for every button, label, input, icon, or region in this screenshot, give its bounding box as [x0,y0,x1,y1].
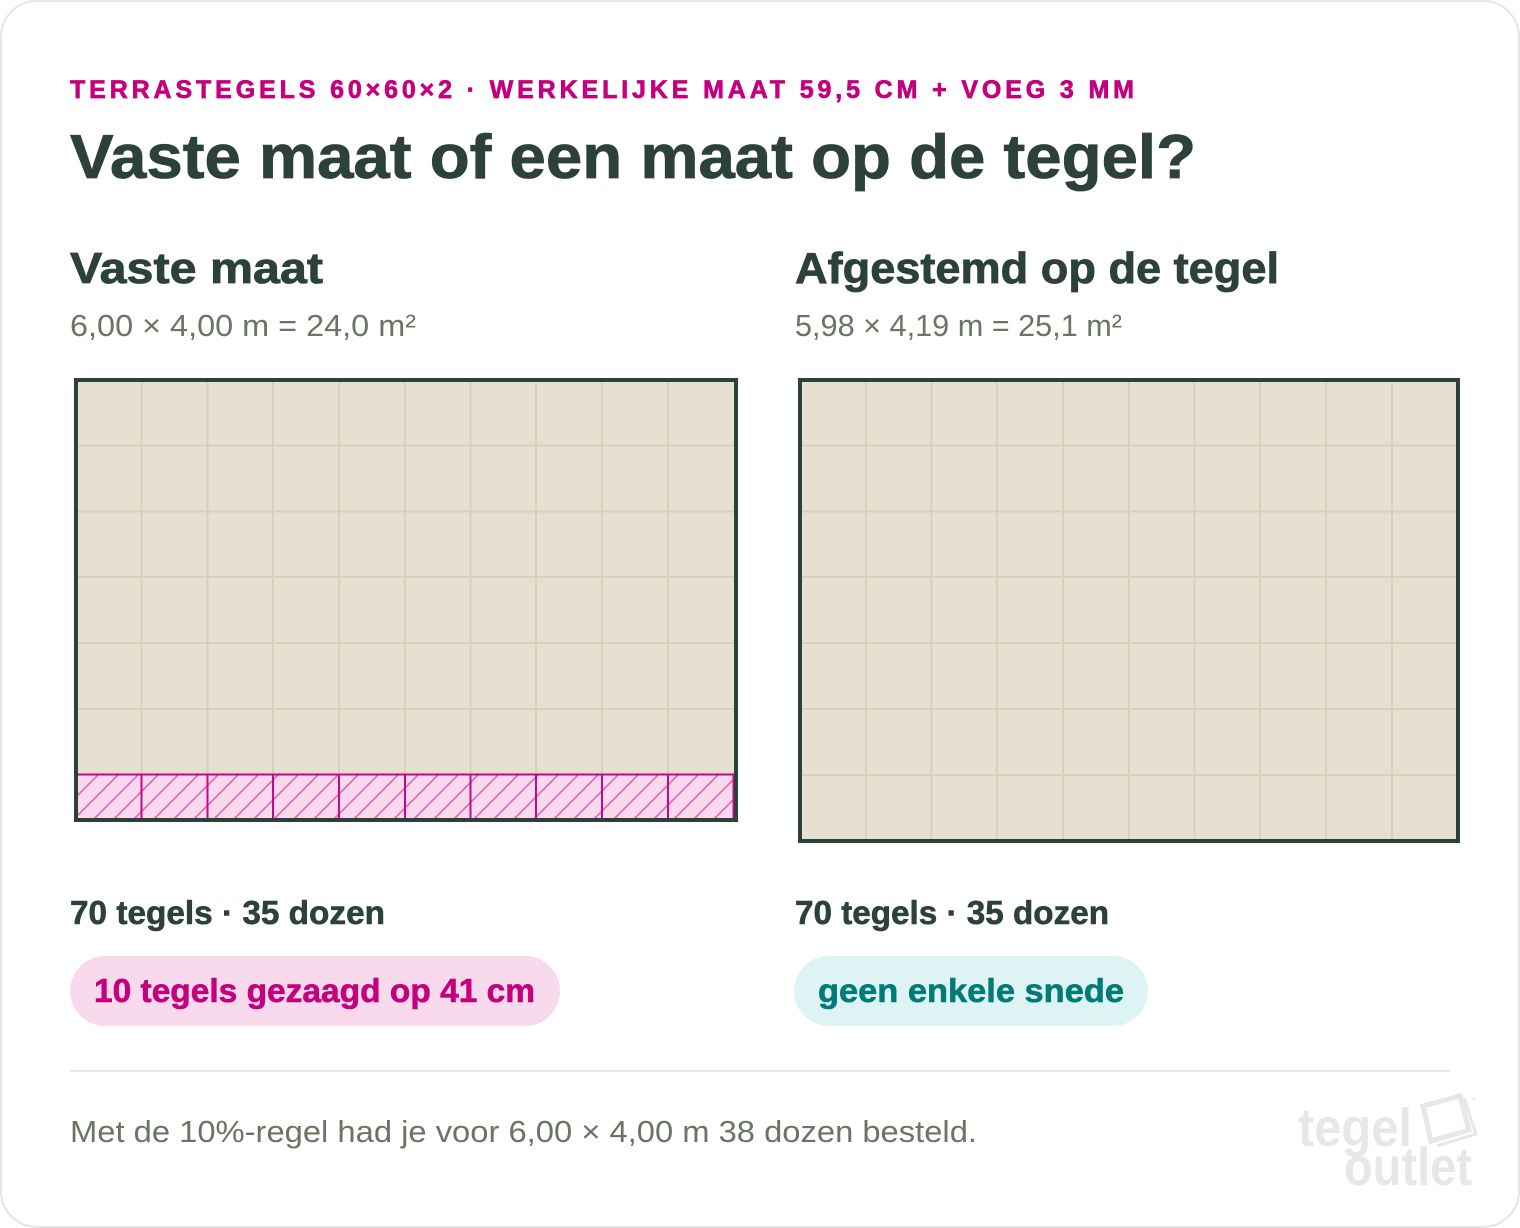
eyebrow: TERRASTEGELS 60×60×2 · WERKELIJKE MAAT 59,5 CM + VOEG 3 MM [70,76,1134,104]
pill: geen snede: geen enkele snede [818,972,1124,1009]
panel: vaste maat [70,244,736,1026]
logo: tegel outlet: outlet [1344,1137,1472,1197]
heading: afgestemd: Afgestemd op de tegel [795,244,1279,293]
panel: afgestemd op de tegel [794,244,1458,1026]
title: Vaste maat of een maat op de tegel? [70,123,1196,192]
dimensions: afgestemd: 5,98 × 4,19 m = 25,1 m² [795,308,1122,343]
logo: tegel outlet: tegel [1298,1098,1412,1158]
stats: vaste maat: 70 tegels · 35 dozen [70,894,385,931]
stats: afgestemd: 70 tegels · 35 dozen [795,894,1109,931]
pill: geen snede [794,956,1148,1026]
pill: gezaagd [70,956,560,1026]
footer note: Met de 10%-regel had je voor 6,00 × 4,00 m 38 dozen besteld. [70,1114,977,1149]
pill: gezaagd: 10 tegels gezaagd op 41 cm [94,972,535,1009]
tile grid: vaste maat [76,380,736,820]
heading: vaste maat: Vaste maat [70,244,323,293]
logo: tegel outlet [1298,1096,1476,1197]
tile grid: afgestemd [800,380,1458,841]
sawn tile row [78,775,734,818]
dimensions: vaste maat: 6,00 × 4,00 m = 24,0 m² [70,308,416,343]
